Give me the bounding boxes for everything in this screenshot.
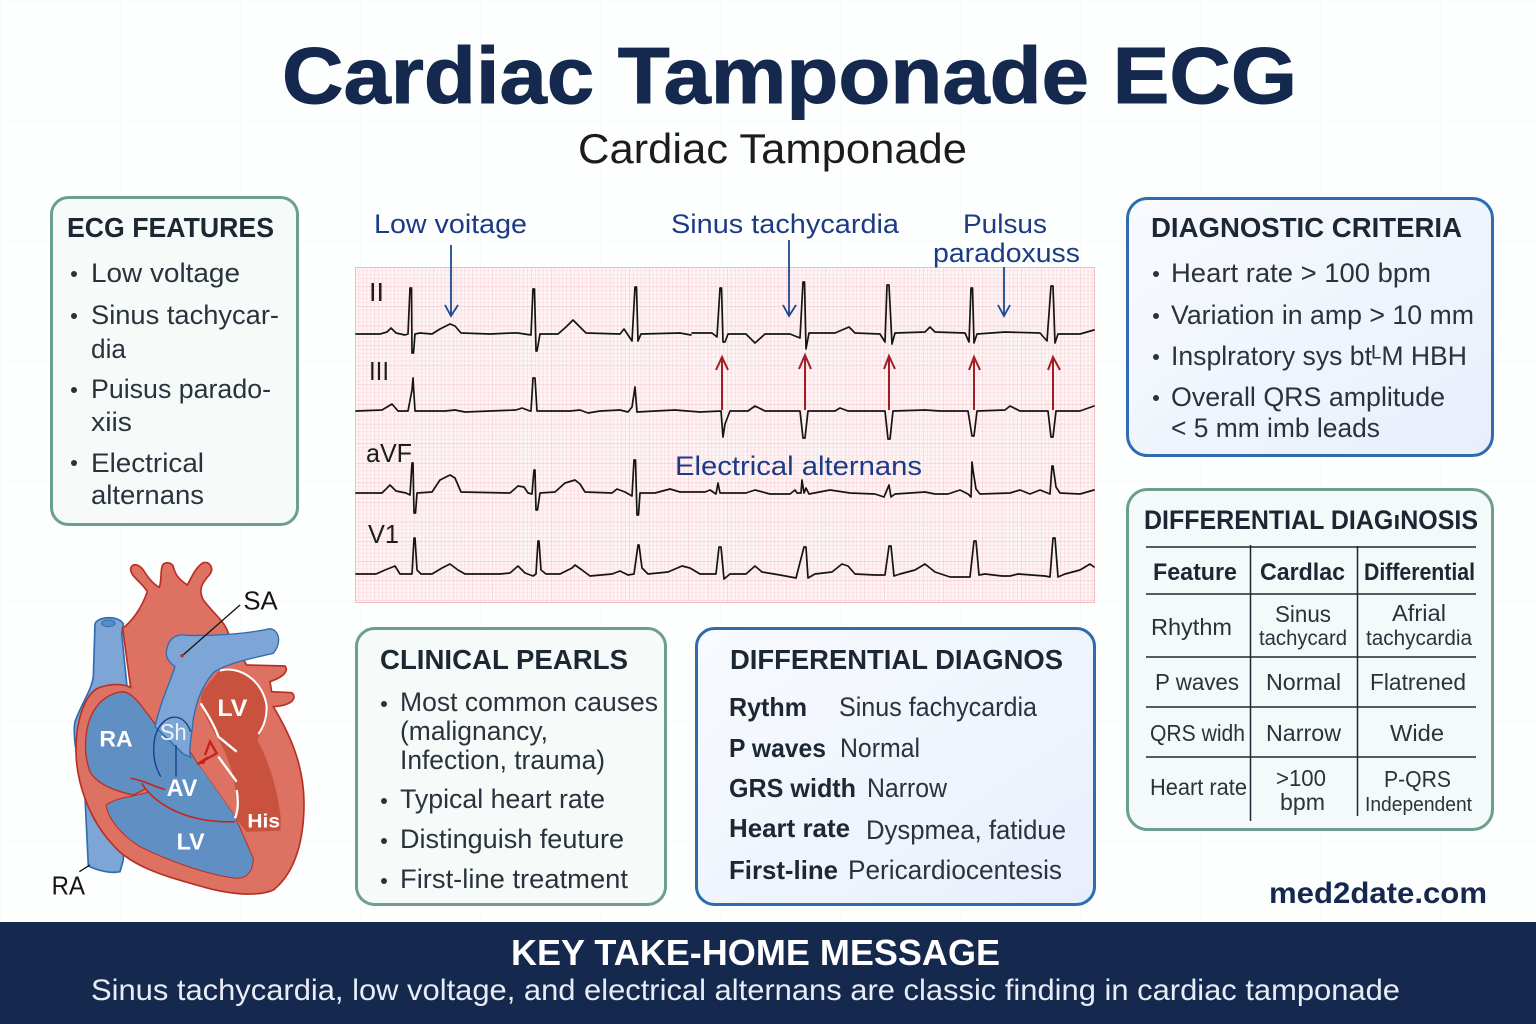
heart body and aorta [76, 563, 304, 894]
table: Narrow [1266, 720, 1341, 746]
label: RA: RA [52, 870, 86, 900]
lead labels: aVF [366, 438, 412, 468]
vena cava [74, 618, 127, 872]
list: diagnostic criteria: Variation in amp > 10 mm [1171, 300, 1474, 330]
rows: differential diagnosis list: First-line [729, 855, 838, 885]
label: SA: SA [243, 585, 278, 615]
arrow: low voltage [445, 245, 458, 316]
atrioventricular region [140, 725, 235, 821]
arrow: sinus tachycardia [783, 240, 796, 316]
pulmonary artery [155, 629, 279, 757]
footer banner [0, 922, 1536, 1024]
annotation: pulsus paradoxus: paradoxuss [933, 238, 1080, 268]
right atrium [85, 692, 163, 795]
table: >100 [1276, 765, 1326, 791]
list: diagnostic criteria [1153, 258, 1474, 443]
list: ECG features: Electrical [91, 448, 204, 478]
subtitle: Cardiac Tamponade [578, 125, 967, 172]
list: ECG features: Sinus tachycar- [91, 300, 279, 330]
conduction pathway [131, 670, 267, 822]
list: ECG features [71, 258, 279, 510]
rows: differential diagnosis list: Normal [840, 733, 920, 763]
list: ECG features: Puisus parado- [91, 374, 271, 404]
table: Cardlac [1260, 559, 1345, 586]
list: diagnostic criteria: Insplratory sys btᴸM HBH [1171, 341, 1467, 371]
list: diagnostic criteria: < 5 mm imb leads [1171, 413, 1380, 443]
table: Normal [1266, 669, 1341, 695]
trace: lead aVF [356, 460, 1094, 515]
panel: ECG features [52, 198, 298, 524]
annotation: low voltage: Low voitage [374, 209, 527, 239]
rows: differential diagnosis list [729, 692, 1066, 885]
chamber labels: His [247, 811, 280, 832]
table: P-QRS [1384, 766, 1451, 792]
table: Flatrened [1370, 669, 1466, 695]
list: diagnostic criteria: Heart rate > 100 bpm [1171, 258, 1431, 288]
panel: diagnostic criteria [1128, 198, 1492, 456]
table: Independent [1365, 794, 1472, 816]
lead labels: II [369, 277, 384, 307]
trace: lead V1 [356, 538, 1094, 579]
lead labels: V1 [368, 519, 399, 549]
trace: lead II [356, 282, 1094, 353]
heading: clinical pearls: CLINICAL PEARLS [380, 644, 628, 675]
list: clinical pearls: (malignancy, [400, 716, 548, 746]
rows: differential diagnosis list: Dyspmea, fatidue [866, 815, 1066, 845]
table: Sinus [1275, 601, 1331, 627]
table: tachycard [1259, 627, 1347, 650]
table: Rhythm [1151, 614, 1232, 640]
list: clinical pearls: Infection, trauma) [400, 745, 605, 775]
rows: differential diagnosis list: Pericardiocentesis [848, 855, 1062, 885]
list: clinical pearls: Typical heart rate [400, 784, 605, 814]
table [1146, 545, 1476, 821]
panel: differential diagnosis list [696, 628, 1094, 904]
heart diagram [52, 563, 304, 900]
chamber labels [99, 695, 280, 854]
table: P waves [1155, 669, 1239, 695]
annotation: pulsus paradoxus: Pulsus [963, 209, 1047, 239]
rows: differential diagnosis list: Heart rate [729, 813, 850, 843]
footer message: Sinus tachycardia, low voltage, and electrical alternans are classic finding in cardiac tamponade [91, 974, 1400, 1007]
label: SA [180, 585, 278, 657]
ECG strip [356, 268, 1094, 602]
panel: clinical pearls [356, 628, 666, 904]
list: ECG features: alternans [91, 480, 204, 510]
footer heading: KEY TAKE-HOME MESSAGE [511, 932, 1000, 973]
rows: differential diagnosis list: Narrow [867, 773, 947, 803]
list: clinical pearls: Distinguish feuture [400, 824, 624, 854]
table: Wide [1390, 720, 1444, 746]
chamber labels: Sh [160, 719, 187, 745]
panel: differential diagnosis table [1128, 490, 1492, 830]
list: clinical pearls: Most common causes [400, 687, 658, 717]
lead labels [366, 277, 412, 549]
arrows: electrical alternans [716, 355, 1060, 410]
rows: differential diagnosis list: GRS width [729, 773, 856, 803]
arrow: pulsus paradoxus [998, 267, 1010, 316]
trace: lead III [356, 378, 1094, 439]
lead labels: III [369, 356, 389, 386]
table: Afrial [1392, 600, 1446, 626]
rows: differential diagnosis list: Sinus fachycardia [839, 692, 1038, 722]
rows: differential diagnosis list: Rythm [729, 692, 807, 722]
table: tachycardia [1366, 627, 1472, 650]
table: Feature [1153, 559, 1237, 586]
list: ECG features: dia [91, 334, 127, 364]
chamber labels: LV [177, 828, 205, 854]
table: Heart rate [1150, 774, 1247, 800]
lower ventricle [106, 752, 253, 878]
heading: diagnostic criteria: DIAGNOSTIC CRITERIA [1151, 212, 1462, 243]
heading: ECG features: ECG FEATURES [67, 212, 274, 243]
rows: differential diagnosis list: P waves [729, 733, 826, 763]
title: Cardiac Tamponade ECG [282, 31, 1297, 120]
list: clinical pearls: First-line treatment [400, 864, 628, 894]
list: clinical pearls [381, 687, 658, 894]
annotation: electrical alternans: Electrical alternans [675, 451, 922, 481]
list: ECG features: xiis [91, 407, 132, 437]
annotation: pulsus paradoxus [933, 209, 1080, 268]
left ventricle [201, 670, 281, 832]
heading: differential diagnosis table: DIFFERENTIAL DIAGıNOSIS [1144, 505, 1478, 535]
table: QRS widh [1150, 720, 1245, 746]
annotation: sinus tachycardia: Sinus tachycardia [671, 209, 900, 239]
chamber labels: LV [217, 695, 247, 722]
heading: differential diagnosis list: DIFFERENTIAL DIAGNOS [730, 644, 1063, 675]
chamber labels: RA [99, 727, 133, 752]
list: diagnostic criteria: Overall QRS amplitude [1171, 382, 1445, 412]
chamber labels: AV [167, 775, 197, 802]
table: bpm [1280, 789, 1325, 815]
brand: med2date.com [1269, 877, 1487, 910]
table: Differential [1364, 559, 1475, 586]
list: ECG features: Low voltage [91, 258, 240, 288]
